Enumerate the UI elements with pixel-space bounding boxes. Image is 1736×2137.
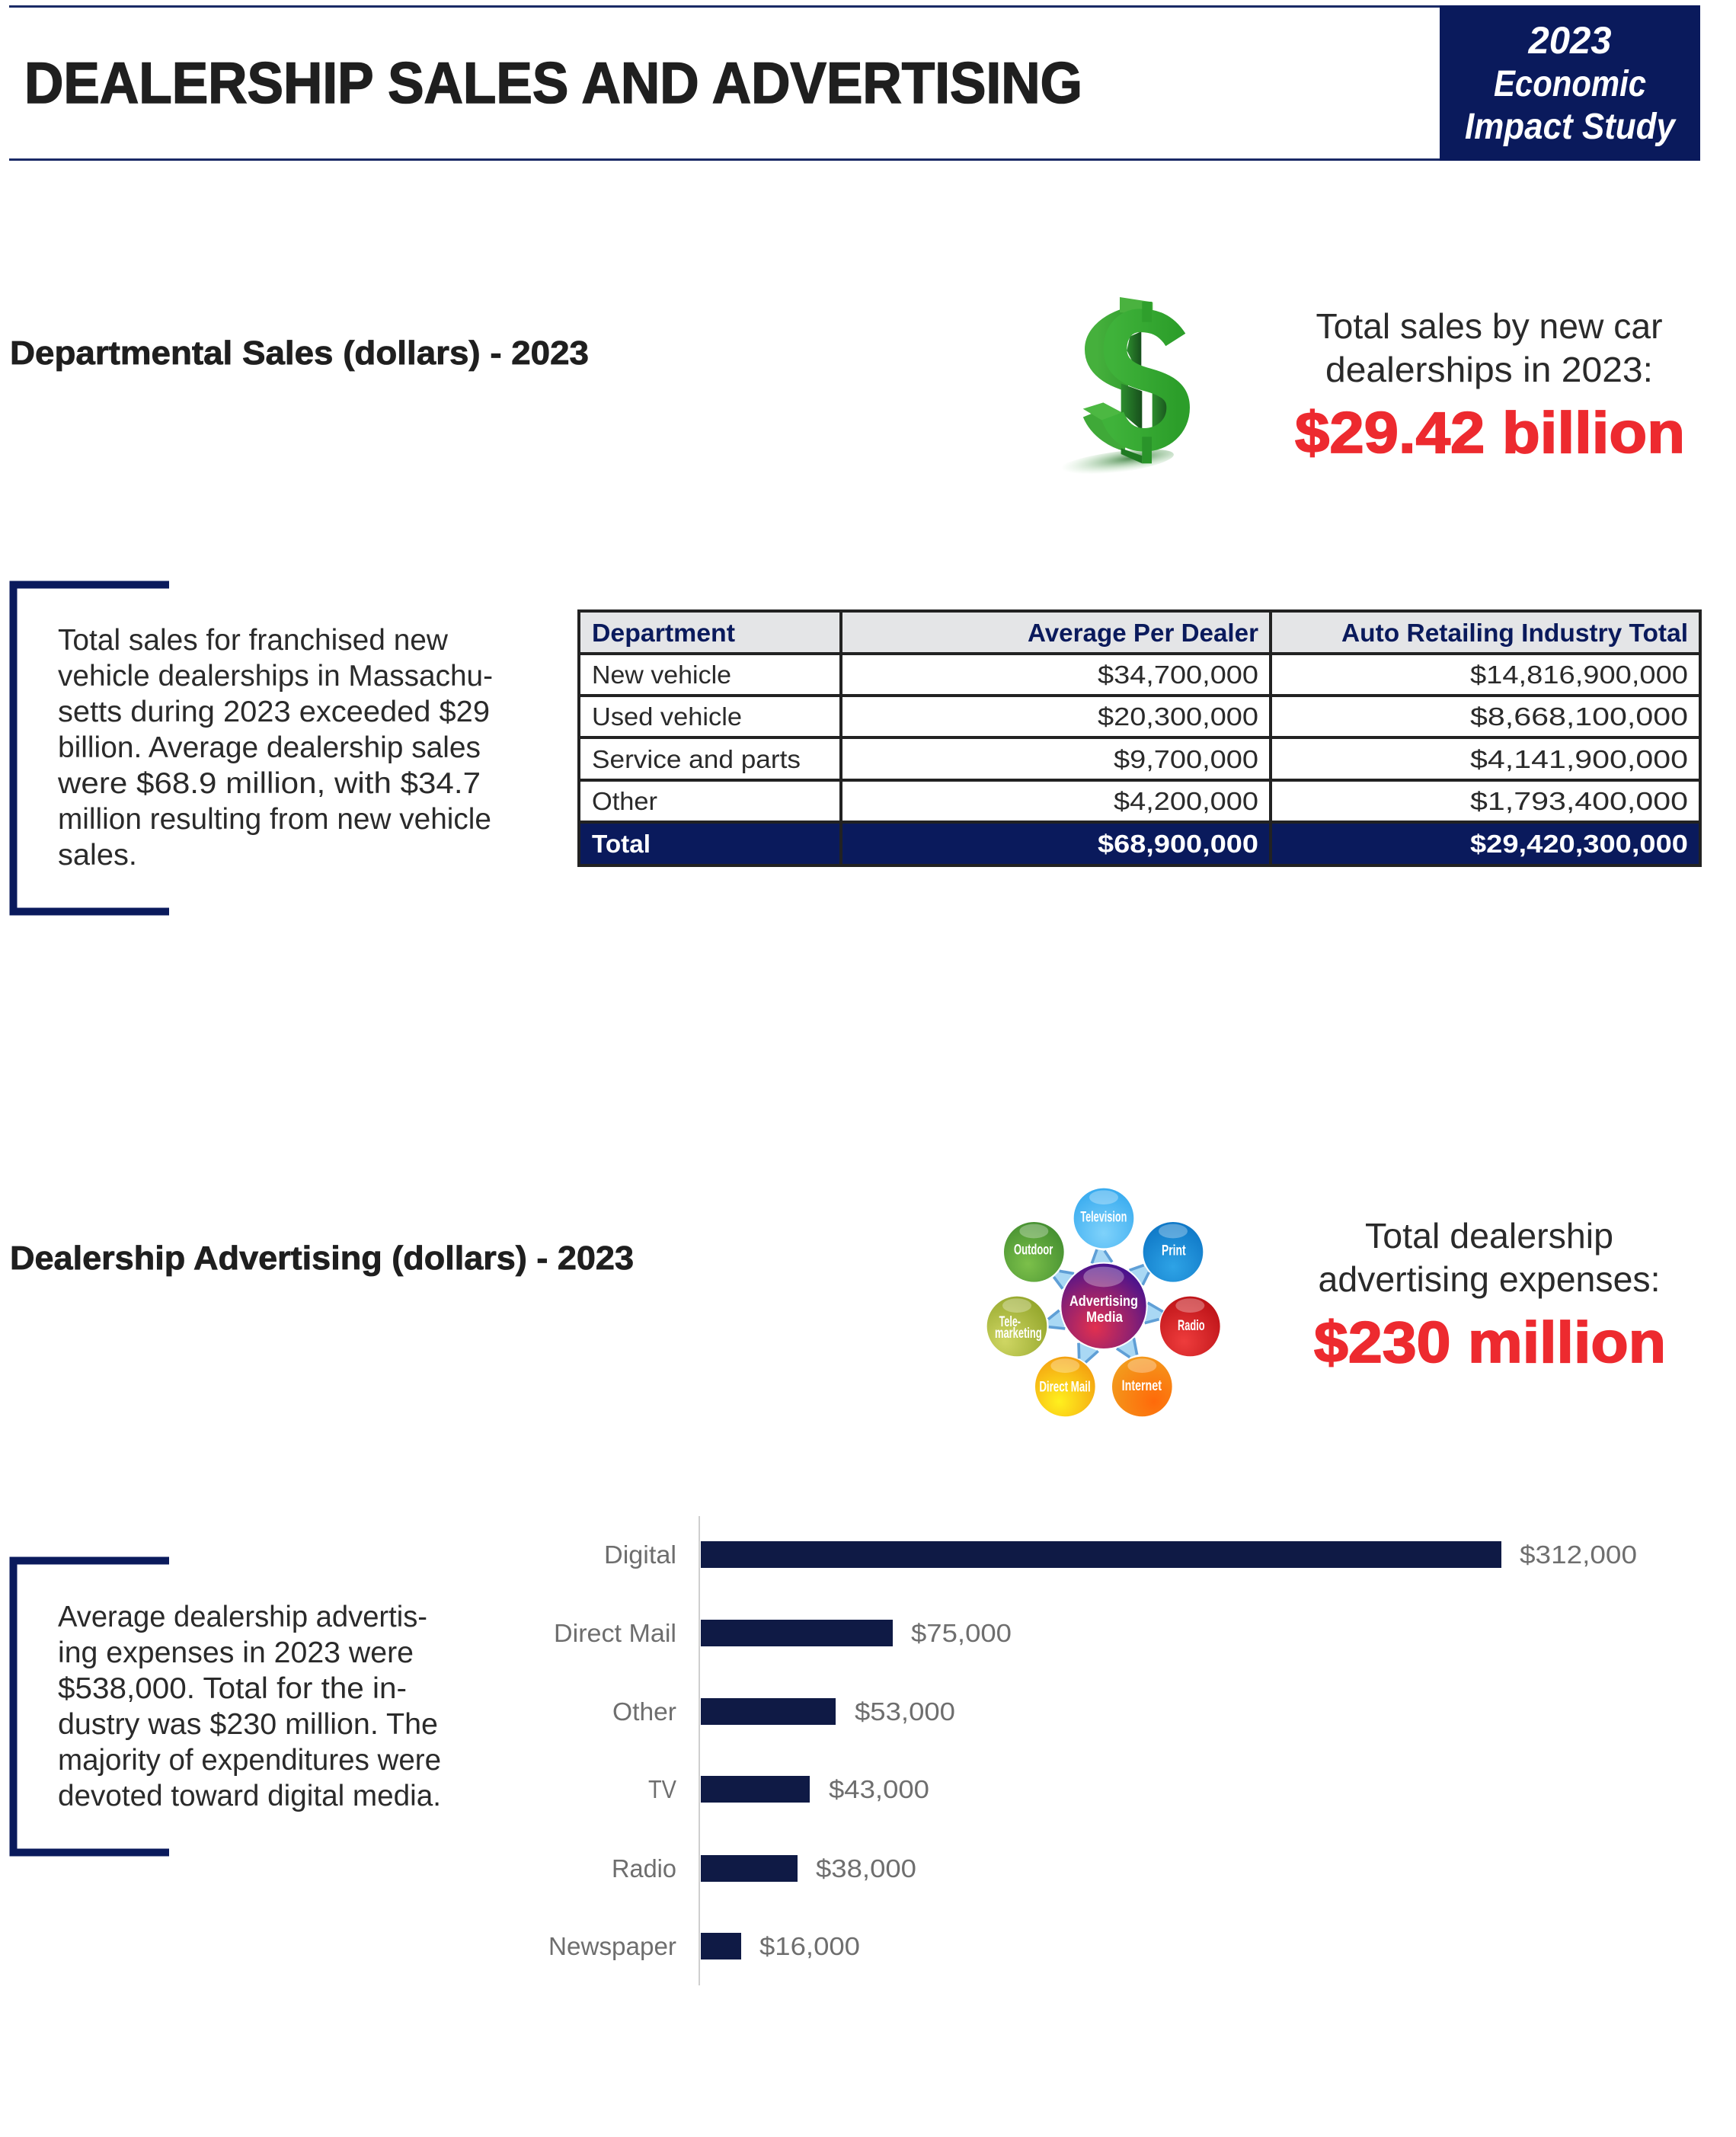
sphere: radio bbox=[1160, 1297, 1220, 1356]
bar: radio bbox=[612, 1854, 916, 1883]
row: other: Other bbox=[592, 787, 657, 815]
badge: 2023 Economic Impact Study: Economic bbox=[1494, 64, 1646, 104]
panel: advertising summary text: Average dealership advertis- bbox=[58, 1601, 427, 1633]
row: total: Total bbox=[592, 830, 651, 858]
callout: total sales: dealerships in 2023: bbox=[1325, 350, 1653, 389]
bar: digital bbox=[604, 1540, 1637, 1569]
panel: advertising summary text: devoted toward digital media. bbox=[58, 1780, 441, 1812]
bar: tv: $43,000 bbox=[829, 1775, 929, 1803]
sphere: direct mail: Direct Mail bbox=[1039, 1380, 1091, 1396]
table: departmental sales bbox=[579, 611, 1700, 865]
sphere: telemarketing bbox=[987, 1297, 1047, 1356]
row: total: $29,420,300,000 bbox=[1470, 830, 1688, 858]
sphere: advertising media: Media bbox=[1086, 1310, 1123, 1326]
sphere: television bbox=[1074, 1188, 1133, 1248]
bar: direct mail: $75,000 bbox=[911, 1619, 1012, 1647]
badge: 2023 Economic Impact Study: 2023 bbox=[1528, 19, 1612, 62]
row: new vehicle: $14,816,900,000 bbox=[1470, 661, 1688, 689]
callout: total advertising bbox=[1314, 1216, 1666, 1375]
panel: sales summary text bbox=[14, 585, 493, 911]
panel: advertising summary text bbox=[14, 1560, 441, 1853]
panel: advertising summary text: $538,000. Total for the in- bbox=[58, 1672, 407, 1705]
bar chart: average advertising by medium bbox=[548, 1516, 1637, 1985]
panel: sales summary text: setts during 2023 exceeded $29 bbox=[58, 696, 490, 728]
sphere: advertising media: Advertising bbox=[1069, 1294, 1138, 1310]
callout: total sales: Total sales by new car bbox=[1316, 306, 1662, 346]
heading: dealership advertising: Dealership Advertising (dollars) - 2023 bbox=[10, 1240, 634, 1277]
sphere: television: Television bbox=[1080, 1209, 1127, 1225]
table header row: Department bbox=[592, 619, 735, 647]
sphere: direct mail bbox=[1035, 1357, 1095, 1416]
panel: sales summary text: vehicle dealerships in Massachu- bbox=[58, 660, 493, 693]
row: new vehicle: New vehicle bbox=[592, 661, 731, 689]
bar: newspaper bbox=[548, 1932, 860, 1960]
row: other: $1,793,400,000 bbox=[1470, 787, 1688, 815]
bar: other: $53,000 bbox=[855, 1697, 955, 1726]
sphere: internet: Internet bbox=[1122, 1378, 1162, 1394]
sphere: telemarketing: Tele- bbox=[999, 1314, 1021, 1330]
callout: total advertising: $230 million bbox=[1314, 1310, 1666, 1375]
bar: other: Other bbox=[612, 1697, 676, 1726]
row: other bbox=[592, 787, 1688, 815]
sphere: print bbox=[1143, 1222, 1203, 1282]
bar: newspaper: Newspaper bbox=[548, 1932, 676, 1960]
panel: advertising summary text: dustry was $230 million. The bbox=[58, 1708, 438, 1741]
bar: newspaper: $16,000 bbox=[759, 1932, 860, 1960]
sphere: advertising media bbox=[1060, 1263, 1147, 1349]
row: used vehicle: Used vehicle bbox=[592, 702, 742, 731]
row: used vehicle: $8,668,100,000 bbox=[1470, 702, 1688, 731]
panel: sales summary text: sales. bbox=[58, 839, 137, 872]
title: DEALERSHIP SALES AND ADVERTISING bbox=[24, 51, 1082, 116]
row: service and parts: Service and parts bbox=[592, 745, 801, 773]
sphere: outdoor bbox=[1004, 1222, 1064, 1282]
bar: other bbox=[612, 1697, 955, 1726]
table header row bbox=[592, 619, 1688, 647]
bar: tv: TV bbox=[648, 1775, 676, 1803]
panel: sales summary text: Total sales for franchised new bbox=[58, 624, 449, 657]
sphere: telemarketing: marketing bbox=[995, 1326, 1042, 1342]
sphere: internet bbox=[1112, 1357, 1172, 1416]
row: total: $68,900,000 bbox=[1098, 830, 1258, 858]
panel: sales summary text: were $68.9 million, with $34.7 bbox=[57, 767, 481, 800]
bar: digital: Digital bbox=[604, 1540, 676, 1569]
badge: 2023 Economic Impact Study bbox=[1440, 5, 1700, 161]
row: service and parts: $4,141,900,000 bbox=[1470, 745, 1688, 773]
callout: total sales: $29.42 billion bbox=[1295, 401, 1685, 465]
bar: direct mail: Direct Mail bbox=[554, 1619, 676, 1647]
row: used vehicle: $20,300,000 bbox=[1098, 702, 1258, 731]
bar: tv bbox=[648, 1775, 929, 1803]
icon: advertising media diagram bbox=[987, 1188, 1220, 1416]
row: service and parts: $9,700,000 bbox=[1114, 745, 1258, 773]
sphere: outdoor: Outdoor bbox=[1014, 1243, 1053, 1259]
row: service and parts bbox=[592, 745, 1688, 773]
row: other: $4,200,000 bbox=[1114, 787, 1258, 815]
bar: digital: $312,000 bbox=[1520, 1540, 1637, 1569]
callout: total sales bbox=[1295, 306, 1685, 465]
sphere: radio: Radio bbox=[1178, 1318, 1205, 1334]
sphere: print: Print bbox=[1162, 1243, 1186, 1259]
row: total bbox=[592, 830, 1688, 858]
bar: radio: Radio bbox=[612, 1854, 676, 1883]
badge: 2023 Economic Impact Study: Impact Study bbox=[1465, 107, 1677, 147]
table header row: Average Per Dealer bbox=[1028, 619, 1258, 647]
row: new vehicle: $34,700,000 bbox=[1098, 661, 1258, 689]
bar: direct mail bbox=[554, 1619, 1012, 1647]
callout: total advertising: Total dealership bbox=[1365, 1216, 1613, 1256]
table header row: Auto Retailing Industry Total bbox=[1341, 619, 1688, 647]
icon: green dollar sign bbox=[1054, 297, 1178, 481]
page header bbox=[9, 5, 1700, 161]
row: used vehicle bbox=[592, 702, 1688, 731]
row: new vehicle bbox=[592, 661, 1688, 689]
panel: sales summary text: million resulting from new vehicle bbox=[58, 803, 491, 836]
callout: total advertising: advertising expenses: bbox=[1318, 1259, 1661, 1299]
panel: advertising summary text: majority of expenditures were bbox=[58, 1744, 441, 1777]
bar: radio: $38,000 bbox=[816, 1854, 916, 1883]
heading: departmental sales: Departmental Sales (dollars) - 2023 bbox=[10, 334, 589, 372]
panel: sales summary text: billion. Average dealership sales bbox=[58, 731, 481, 764]
panel: advertising summary text: ing expenses in 2023 were bbox=[58, 1636, 414, 1669]
